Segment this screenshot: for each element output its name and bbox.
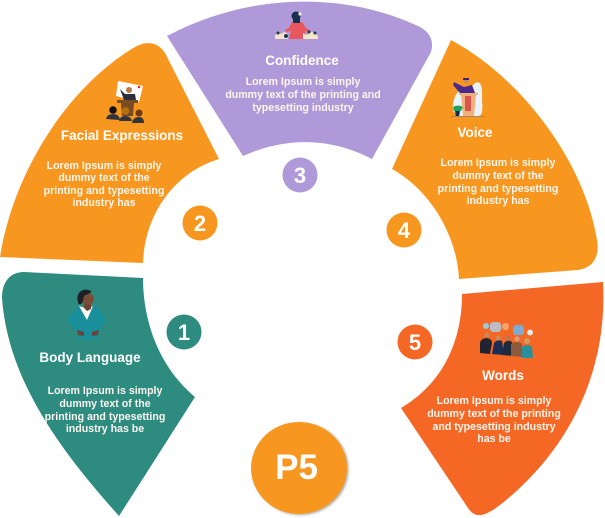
panel: voice bbox=[392, 40, 598, 279]
badge: 1: 1 bbox=[178, 320, 190, 345]
text: body language: Lorem Ipsum is simply bbox=[48, 385, 163, 397]
badge: 1 bbox=[166, 314, 202, 350]
icon: woman in teal jacket bbox=[67, 290, 106, 340]
badge: 3: 3 bbox=[294, 163, 306, 188]
text: words: Lorem Ipsum is simply bbox=[437, 395, 552, 407]
text: confidence: Lorem Ipsum is simply bbox=[246, 76, 361, 88]
icon: man at lectern bbox=[451, 78, 484, 117]
heading: words: Words bbox=[482, 368, 524, 383]
text: body language: industry has be bbox=[66, 423, 144, 435]
icon: speaker at podium bbox=[106, 81, 144, 123]
heading: voice: Voice bbox=[457, 125, 493, 140]
text: voice: printing and typesetting bbox=[438, 183, 558, 195]
text: words: and typesetting industry bbox=[432, 421, 556, 433]
badge: 5: 5 bbox=[409, 330, 421, 355]
text: voice: dummy text of the bbox=[452, 170, 544, 182]
badge: 2: 2 bbox=[194, 211, 206, 236]
text: facial expressions: industry has bbox=[72, 197, 136, 209]
panel: facial expressions bbox=[0, 43, 219, 263]
text: voice: Lorem Ipsum is simply bbox=[441, 157, 556, 169]
badge: 4 bbox=[386, 212, 422, 248]
text: words: has be bbox=[477, 433, 511, 445]
icon: group with speech bubbles bbox=[480, 322, 533, 358]
heading: confidence: Confidence bbox=[265, 53, 339, 68]
text: body language: dummy text of the bbox=[59, 398, 151, 410]
panel: confidence bbox=[167, 2, 432, 159]
text: words: dummy text of the printing bbox=[427, 408, 561, 420]
panel: body language bbox=[2, 272, 195, 516]
text: confidence: typesetting industry bbox=[252, 102, 354, 114]
text: body language: printing and typesetting bbox=[45, 411, 165, 423]
text: facial expressions: printing and typesetting bbox=[44, 185, 164, 197]
text: confidence: dummy text of the printing and bbox=[225, 89, 381, 101]
badge: 2 bbox=[182, 206, 218, 240]
text: facial expressions: Lorem Ipsum is simply bbox=[47, 160, 162, 172]
badge: 3 bbox=[282, 158, 318, 192]
icon: woman addressing audience bbox=[275, 12, 318, 39]
center badge: P5: P5 bbox=[275, 448, 318, 487]
badge: 5 bbox=[398, 324, 432, 360]
heading: facial expressions: Facial Expressions bbox=[61, 128, 183, 143]
panel: words bbox=[401, 282, 603, 515]
badge: 4: 4 bbox=[398, 218, 411, 243]
heading: body language: Body Language bbox=[39, 350, 141, 365]
center badge: P5 bbox=[251, 422, 348, 515]
text: voice: industry has bbox=[466, 195, 530, 207]
text: facial expressions: dummy text of the bbox=[58, 172, 150, 184]
